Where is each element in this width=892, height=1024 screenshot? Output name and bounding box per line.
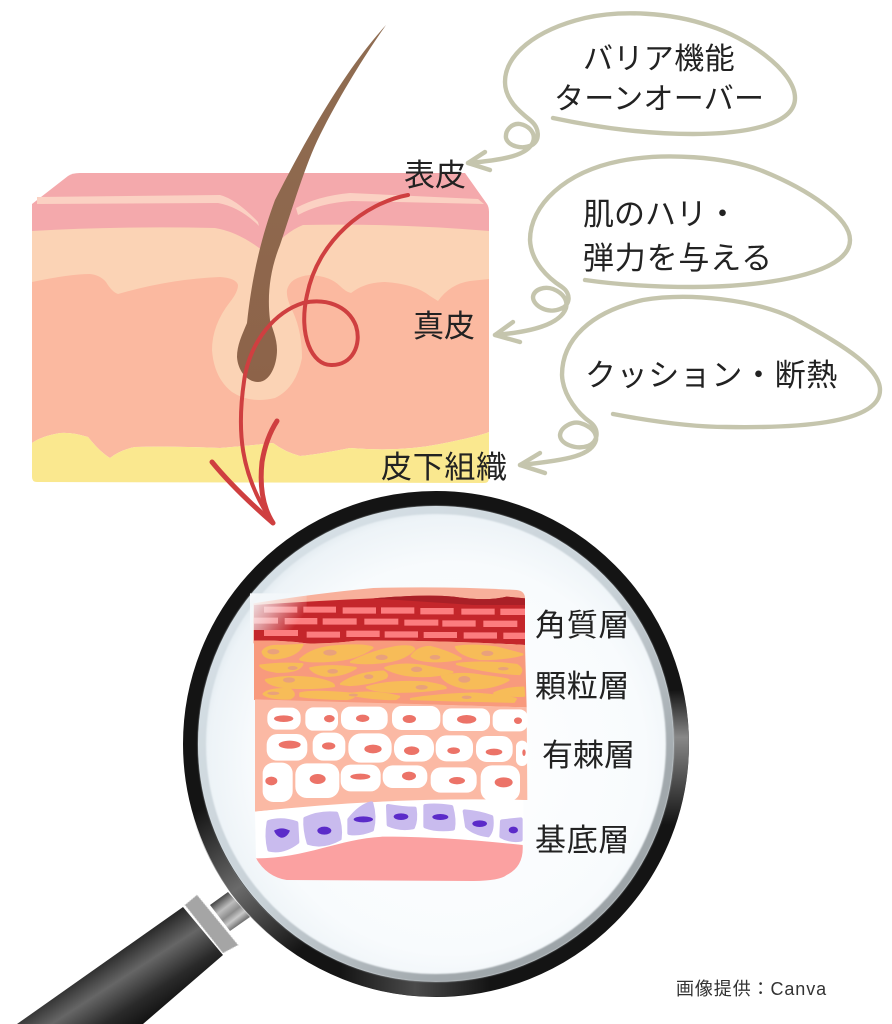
stratum corneum band (250, 593, 525, 645)
handle (17, 892, 250, 1024)
lens rim (190, 498, 682, 990)
stratum basale (255, 799, 523, 860)
basement tissue (256, 837, 523, 881)
label: 表皮: 表皮 (404, 158, 466, 193)
top salmon edge (253, 587, 525, 643)
grip (17, 907, 223, 1024)
illustration: skin cross-section (32, 25, 489, 523)
label: 顆粒層: 顆粒層 (535, 669, 630, 704)
epidermis layer (32, 173, 489, 300)
epidermis layers diagram (250, 587, 528, 881)
label: 真皮: 真皮 (413, 309, 475, 344)
bubble text: バリア機能 (583, 43, 735, 76)
bubble outline with looped arrow (495, 156, 850, 342)
label: 基底層: 基底層 (535, 823, 630, 858)
lens inner bevel (202, 510, 670, 978)
bubble text: クッション・断熱 (585, 358, 838, 393)
bubble outline with looped arrow (520, 297, 880, 473)
stratum spinosum (255, 699, 528, 812)
label: 角質層: 角質層 (535, 608, 630, 643)
magnifying glass (17, 498, 682, 1024)
rim highlights (196, 690, 681, 989)
bubble text line 2: ターンオーバー (554, 83, 764, 116)
arrow: red curve to magnifier (212, 195, 408, 523)
hair (237, 25, 386, 382)
metal neck (210, 892, 250, 931)
bubble outline with looped arrow (468, 13, 795, 170)
label: 有棘層: 有棘層 (542, 738, 635, 773)
image credit: 画像提供：Canva (676, 979, 827, 999)
callout: cushioning (520, 297, 880, 473)
dermis layer (32, 274, 489, 458)
stratum granulosum (254, 641, 527, 707)
label: 皮下組織: 皮下組織 (381, 450, 508, 485)
callout: skin firmness (495, 156, 850, 342)
callout: barrier function (468, 13, 795, 170)
knurled collar (185, 895, 238, 953)
subcutaneous fat layer (32, 432, 489, 483)
bubble text: 肌のハリ・ (583, 197, 738, 232)
bubble text line 2: 弾力を与える (583, 241, 773, 276)
epidermis light stripe (37, 193, 484, 226)
peach upper dermis (32, 225, 489, 410)
